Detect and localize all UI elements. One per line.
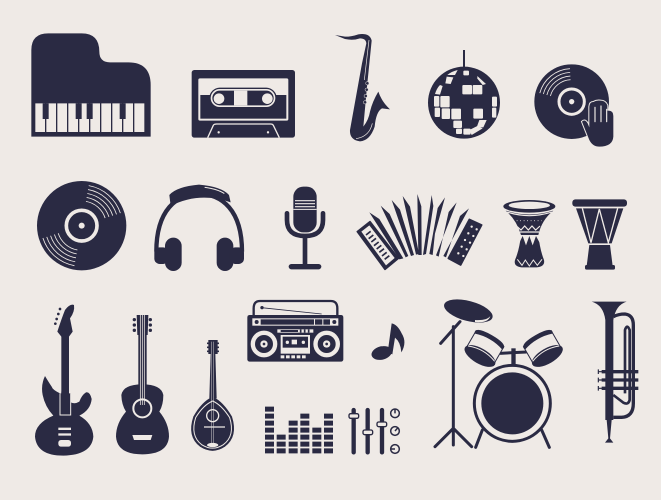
icon: vinyl record — [35, 179, 129, 273]
icon: mixer sliders and knobs — [349, 409, 399, 453]
icon: goblet drum — [503, 200, 555, 267]
icon: microphone — [287, 187, 323, 269]
icon: disco ball — [428, 50, 500, 139]
icon: drum kit — [435, 295, 566, 447]
icon: vinyl record with DJ hand — [531, 61, 613, 147]
icon: headphones — [154, 185, 244, 271]
icon: electric guitar — [35, 305, 93, 456]
icon: cassette tape — [192, 70, 295, 138]
icon: trumpet — [592, 302, 638, 443]
icon: mandolin — [191, 340, 234, 451]
icon: music note — [370, 323, 404, 362]
icon: grand piano — [31, 33, 151, 137]
icon: djembe drum — [572, 199, 627, 270]
icon: saxophone — [335, 34, 390, 141]
icon: equalizer bars — [265, 407, 333, 453]
icon: acoustic guitar — [116, 313, 169, 454]
icon: accordion — [357, 194, 482, 269]
icon: boombox — [247, 301, 343, 362]
